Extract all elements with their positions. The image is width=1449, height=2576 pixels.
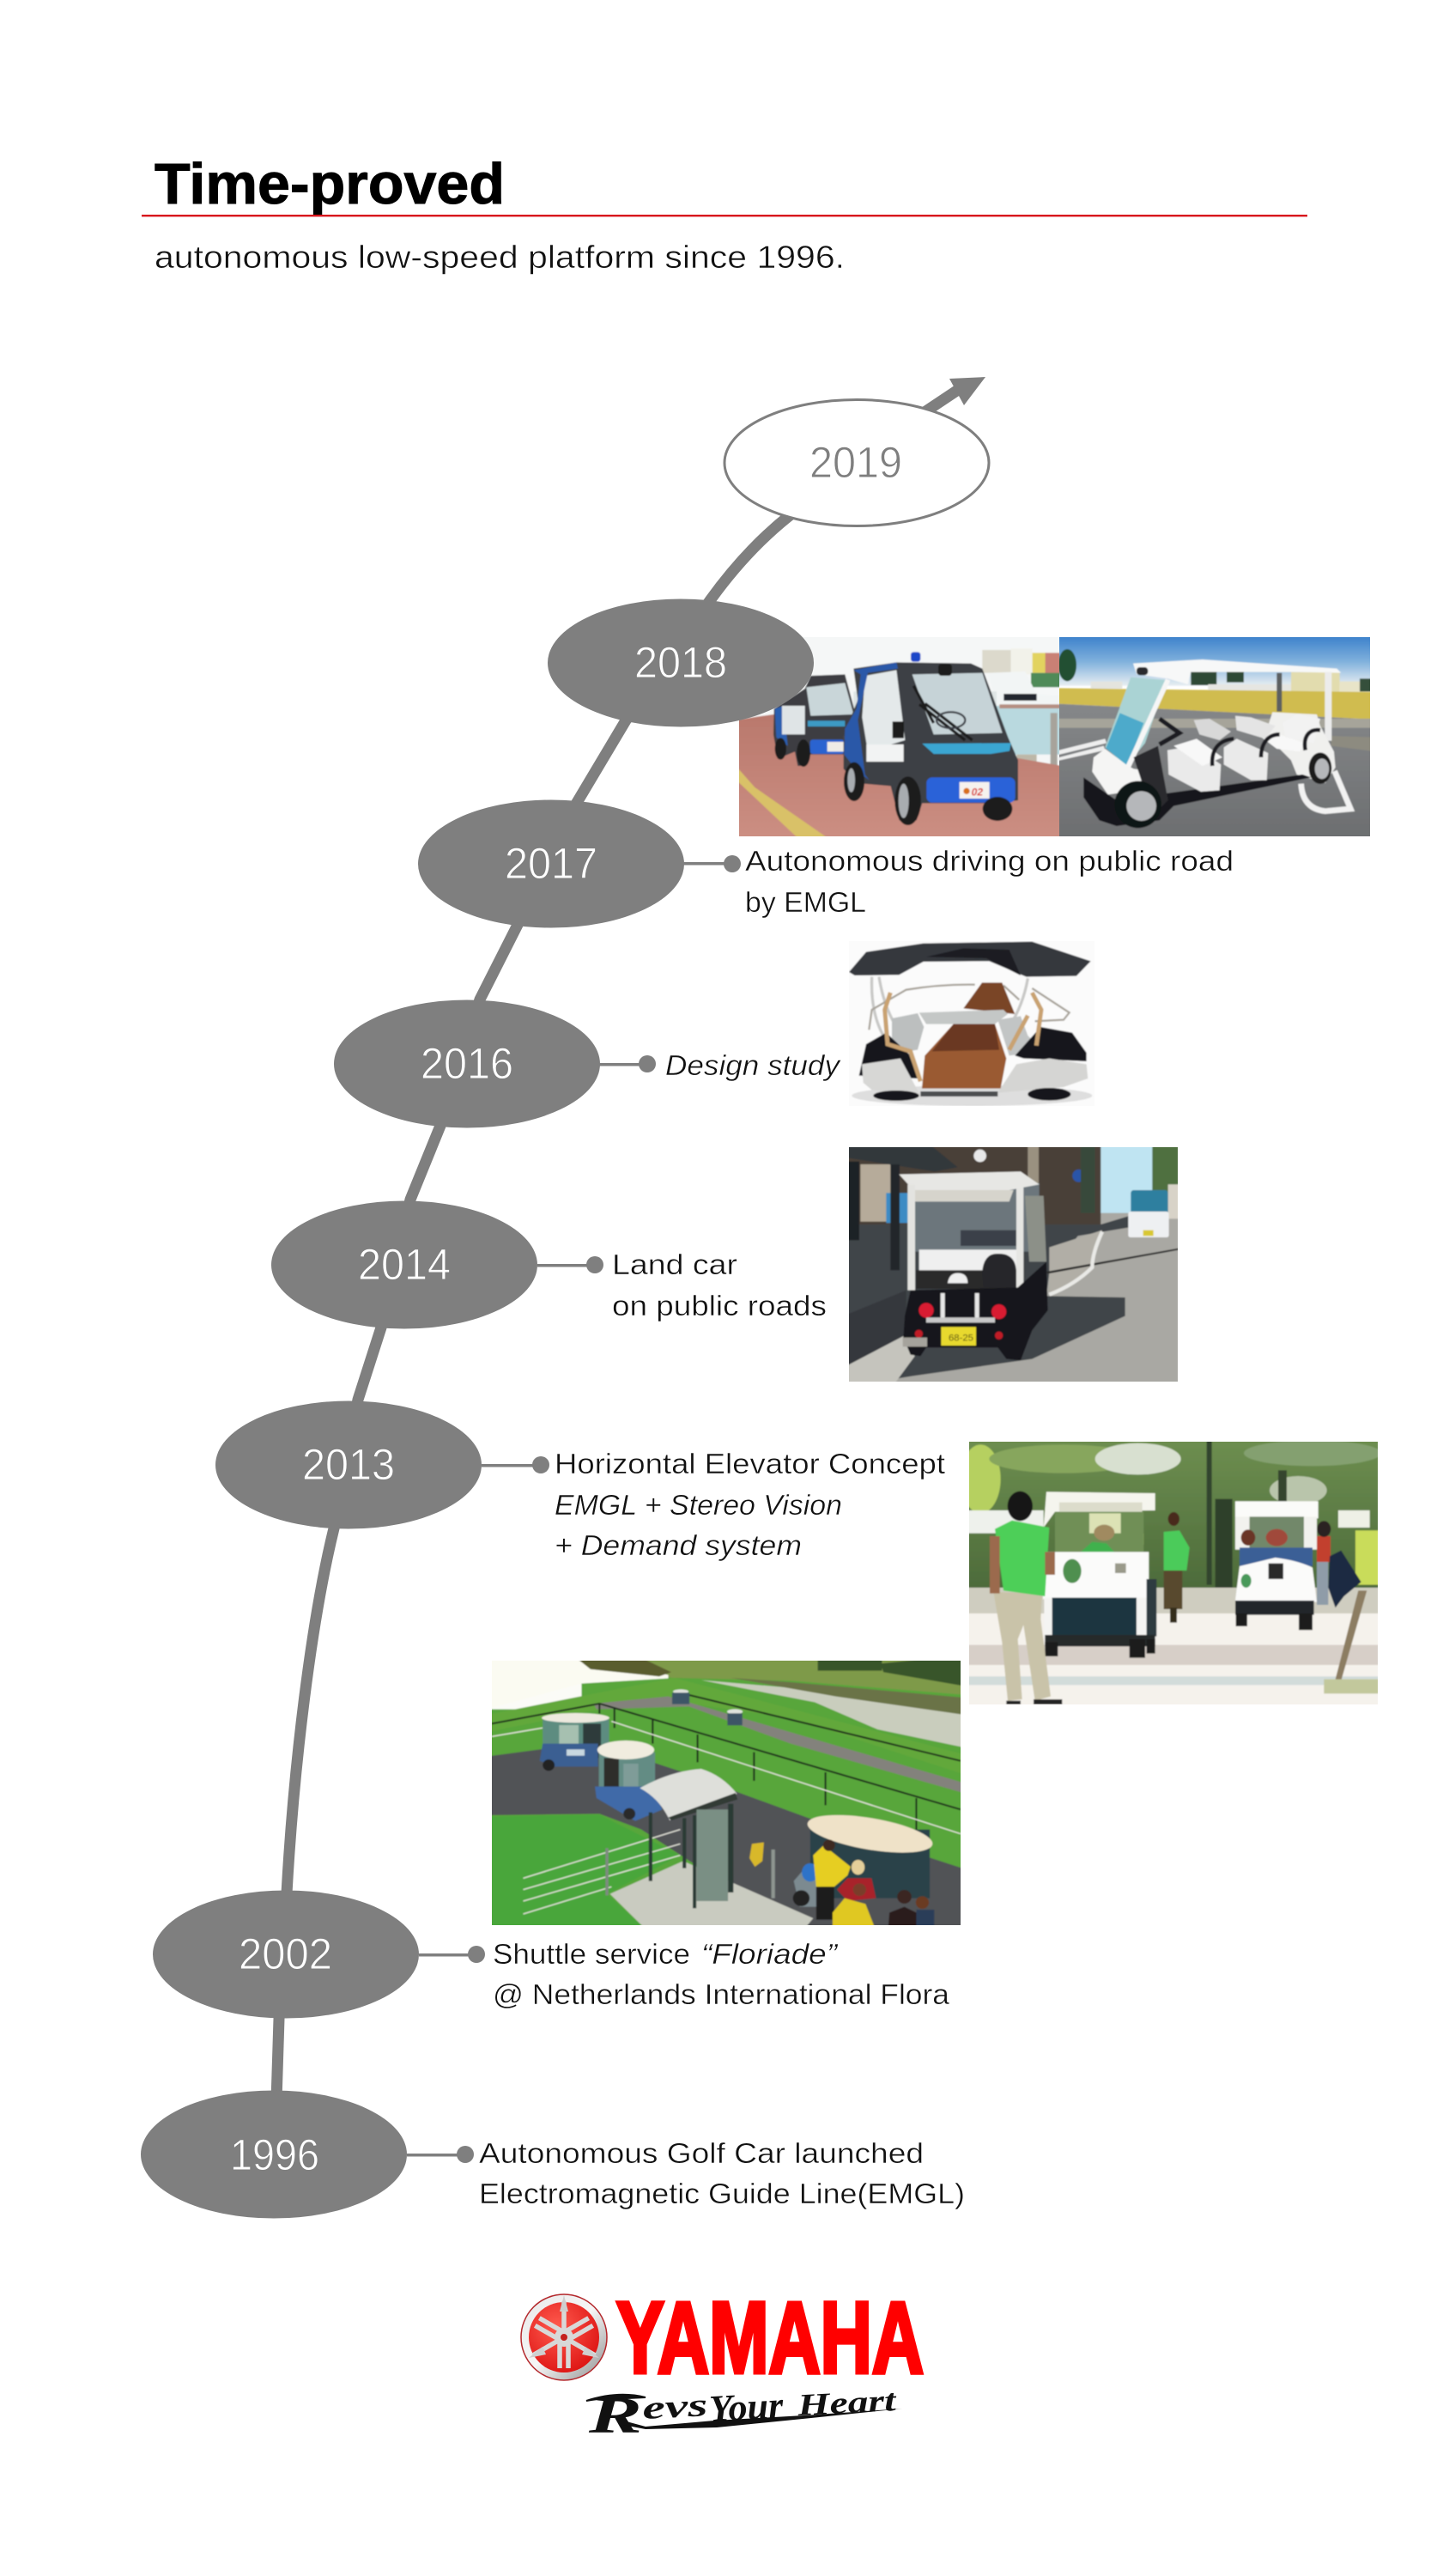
- label: 2014: on public roads: [612, 1290, 827, 1321]
- connector: 1996: [407, 2146, 474, 2163]
- year node: 2017: [418, 800, 684, 927]
- connector: 2002: [419, 1946, 485, 1963]
- label: 2002: “Floriade”: [701, 1938, 839, 1970]
- year node: 2013: 2013: [302, 1440, 395, 1489]
- year node: 2016: 2016: [421, 1039, 513, 1088]
- photo: 2018 blue autonomous cars: [739, 637, 1059, 836]
- people: [1317, 1536, 1331, 1562]
- year node: 2002: 2002: [239, 1929, 332, 1978]
- year node: 2014: [271, 1200, 537, 1329]
- label: 2013: + Demand system: [555, 1529, 802, 1561]
- carts: [673, 1689, 688, 1694]
- photo: 2002 Floriade shuttle: [492, 1661, 961, 1925]
- icon: tuning fork emblem: [521, 2294, 607, 2380]
- year node: 2016: [334, 999, 600, 1128]
- subtitle: autonomous low-speed platform since 1996.: [155, 240, 845, 275]
- label: 1996: Autonomous Golf Car launched: [479, 2137, 924, 2169]
- year node: 2018: 2018: [634, 638, 727, 687]
- label: 2013: [555, 1448, 945, 1561]
- tagline: Revs Your Heart: Heart: [796, 2383, 898, 2422]
- label: 2017: by EMGL: [745, 886, 866, 918]
- year node: 1996: [141, 2090, 407, 2219]
- year node: 2018: [548, 599, 814, 726]
- connector: 2013: [482, 1456, 549, 1473]
- photo: 2014 land car: [849, 1147, 1178, 1382]
- year node: 2014: 2014: [358, 1240, 451, 1289]
- year node: 2019: 2019: [809, 438, 902, 487]
- timeline curve: [275, 386, 963, 2155]
- shelter: [640, 1769, 737, 1820]
- photo: 2013 horizontal elevator: [969, 1442, 1378, 1704]
- cart and people: [810, 1830, 930, 1899]
- label: 1996: Electromagnetic Guide Line(EMGL): [479, 2178, 965, 2209]
- label: 2016: Design study: [665, 1049, 842, 1081]
- connector: 2014: [537, 1256, 603, 1273]
- year node: 2017: 2017: [505, 839, 597, 888]
- label: 1996: [479, 2137, 965, 2209]
- photo: 2016 design study: [849, 941, 1093, 1106]
- year node: 2013: [215, 1401, 482, 1528]
- cart 2: [1235, 1501, 1319, 1518]
- label: 2002: [493, 1938, 950, 2010]
- wordmark: YAMAHA: YAMAHA: [616, 2281, 924, 2395]
- tagline: Revs Your Heart: [586, 2383, 902, 2444]
- label: 2013: Horizontal Elevator Concept: [555, 1448, 945, 1479]
- title: Time-proved: [155, 152, 505, 216]
- tagline: Revs Your Heart: R: [587, 2387, 642, 2444]
- tagline: Revs Your Heart: Your: [708, 2385, 785, 2430]
- connector: 2016: [599, 1055, 656, 1072]
- label: 2014: [612, 1249, 827, 1321]
- cart 1: [1044, 1492, 1155, 1528]
- connector: 2017: [683, 855, 741, 872]
- label: 2013: EMGL + Stereo Vision: [555, 1489, 842, 1521]
- label: 2017: [745, 845, 1234, 918]
- label: 2014: Land car: [612, 1249, 737, 1280]
- label: 2017: Autonomous driving on public road: [745, 845, 1234, 877]
- label: 2002: Shuttle service: [493, 1938, 690, 1970]
- photo: 2018 open cart: [1059, 637, 1370, 836]
- year node: 2002: [153, 1891, 419, 2018]
- year node: 1996: 1996: [230, 2130, 319, 2179]
- arrow head: [949, 377, 985, 405]
- logo: Yamaha: [521, 2281, 924, 2444]
- title underline: [142, 215, 1307, 216]
- label: 2002: @ Netherlands International Flora: [493, 1978, 950, 2010]
- tagline: Revs Your Heart: evs: [641, 2387, 708, 2427]
- big car: [844, 662, 1018, 820]
- small car: [773, 674, 857, 766]
- photo: 2014 land car: 68-25: [949, 1333, 973, 1343]
- photo: 2018 blue autonomous cars: 02: [972, 786, 983, 798]
- year node: 2019: [724, 400, 989, 526]
